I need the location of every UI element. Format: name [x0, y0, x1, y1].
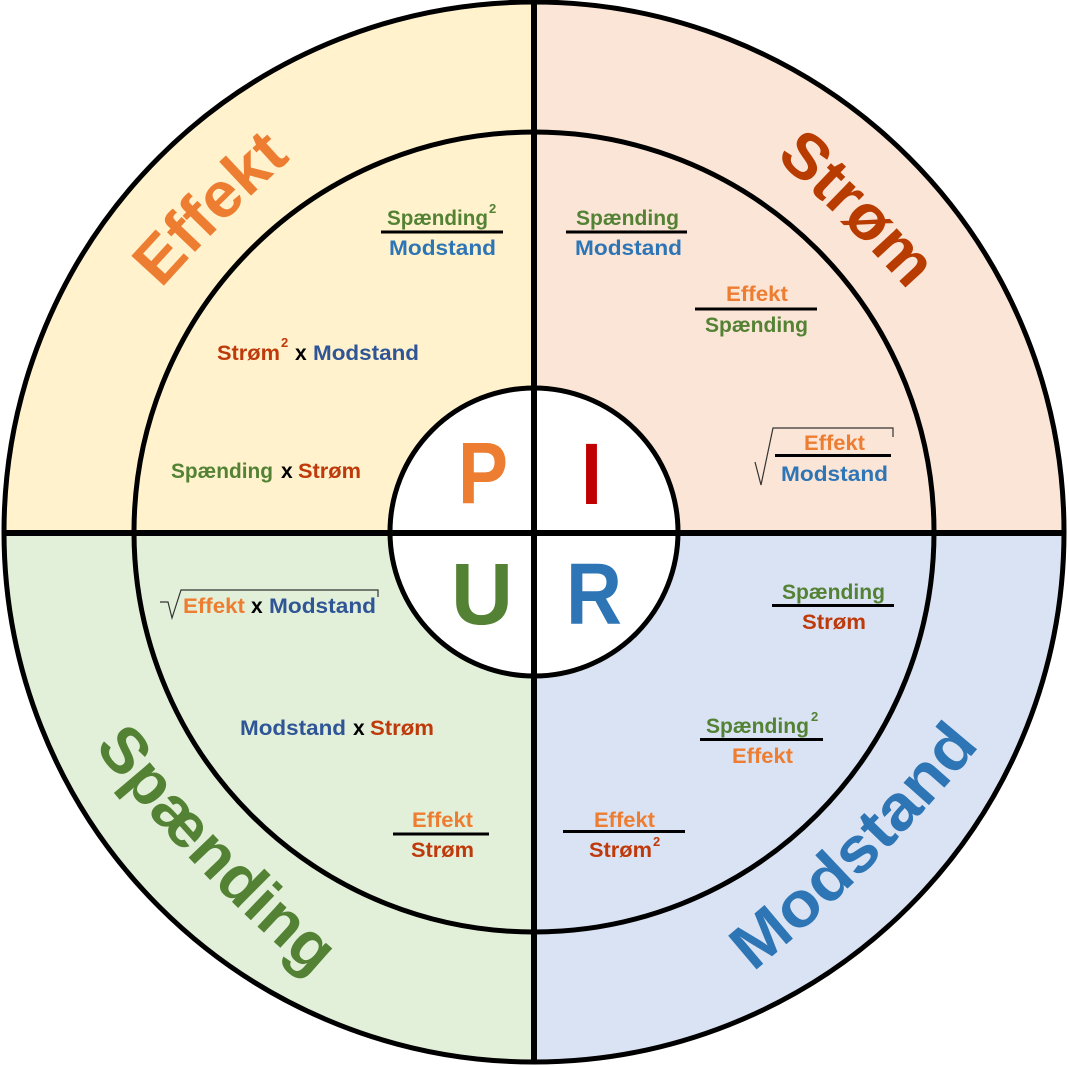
- formula: Spænding x Strøm: Spænding: [171, 460, 273, 483]
- formula: square root of Effekt x Modstand: Effekt: [183, 595, 245, 618]
- formula: Spænding over Modstand: Modstand: [575, 237, 682, 260]
- formula: Spænding x Strøm: [171, 460, 361, 483]
- formula: Spænding x Strøm: x: [281, 460, 293, 483]
- formula: Strøm squared x Modstand: x: [295, 342, 307, 365]
- formula: square root of Effekt over Modstand: [755, 428, 893, 486]
- formula: Strøm squared x Modstand: Modstand: [313, 342, 419, 365]
- formula: Spænding squared over Effekt: [700, 709, 823, 768]
- formula: square root of Effekt over Modstand: Modstand: [781, 463, 888, 486]
- formula: Strøm squared x Modstand: Strøm: [217, 342, 280, 365]
- heading: Effekt: Effekt: [131, 133, 290, 286]
- formula: Effekt over Strøm squared: [563, 809, 685, 862]
- formula: Spænding squared over Effekt: 2: [811, 709, 818, 724]
- formula: Spænding squared over Modstand: 2: [489, 201, 496, 216]
- formula: Modstand x Strøm: x: [353, 717, 365, 740]
- center letter I: I: [581, 426, 602, 523]
- formula: Spænding over Strøm: [772, 581, 894, 634]
- formula: Strøm squared x Modstand: 2: [281, 335, 288, 350]
- formula: Effekt over Spænding: [695, 283, 817, 337]
- formula: Modstand x Strøm: Strøm: [370, 717, 434, 740]
- formula: Effekt over Spænding: Effekt: [726, 283, 788, 306]
- formula: square root of Effekt over Modstand: Effekt: [804, 432, 865, 455]
- formula: Spænding x Strøm: Strøm: [298, 460, 361, 483]
- formula: Spænding squared over Effekt: Spænding: [706, 715, 809, 738]
- formula: Spænding squared over Modstand: Spænding: [387, 207, 488, 230]
- heading: Spænding: Spænding: [100, 727, 332, 978]
- formula: Effekt over Strøm squared: Strøm: [589, 839, 652, 862]
- formula: square root of Effekt x Modstand: x: [251, 595, 263, 618]
- formula: Effekt over Strøm: Strøm: [411, 839, 474, 862]
- center letter R: R: [566, 546, 622, 643]
- formula: Spænding squared over Modstand: Modstand: [389, 237, 496, 260]
- formula: Spænding over Strøm: Strøm: [802, 611, 866, 634]
- heading: Modstand: Modstand: [728, 720, 977, 970]
- center letter U: U: [451, 546, 513, 643]
- formula: Spænding over Strøm: Spænding: [782, 581, 885, 604]
- formula: Spænding over Modstand: [566, 207, 687, 260]
- formula: Effekt over Strøm squared: 2: [653, 834, 660, 849]
- formula: Effekt over Spænding: Spænding: [705, 314, 808, 337]
- formula: Effekt over Strøm: [393, 809, 489, 862]
- formula: square root of Effekt x Modstand: Modstand: [269, 595, 376, 618]
- heading: Strøm: Strøm: [782, 132, 927, 288]
- formula: Spænding squared over Modstand: [381, 201, 503, 260]
- formula: Spænding squared over Effekt: Effekt: [732, 745, 793, 768]
- formula: Effekt over Strøm: Effekt: [412, 809, 473, 832]
- center white disc: [390, 388, 678, 676]
- formula: Spænding over Modstand: Spænding: [576, 207, 679, 230]
- formula: Modstand x Strøm: Modstand: [240, 717, 346, 740]
- formula: Effekt over Strøm squared: Effekt: [594, 809, 655, 832]
- center letter P: P: [458, 425, 508, 522]
- formula: Strøm squared x Modstand: [217, 335, 419, 365]
- formula: Modstand x Strøm: [240, 717, 434, 740]
- formula: square root of Effekt x Modstand: [160, 590, 378, 618]
